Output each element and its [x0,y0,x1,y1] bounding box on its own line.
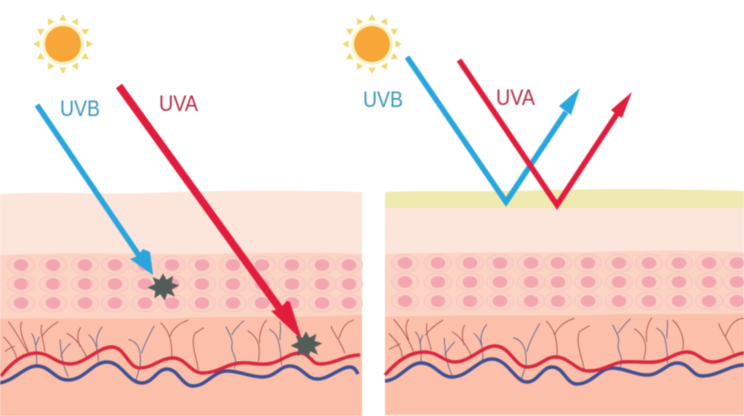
sun: right [342,14,402,74]
sun: left [33,14,93,74]
label: UVB right: UVB [363,87,403,112]
skin layer: outer epidermis [385,205,744,260]
panel: unprotected skin [0,191,362,416]
damage burst: dermis [291,331,322,359]
vein [0,362,358,386]
arrow: UVA penetrating to dermis [119,86,302,340]
arrow: UVB reflected [407,57,580,202]
sunscreen layer [385,189,744,208]
artery [1,347,360,376]
arrow: UVA reflected [459,60,632,205]
panel: protected skin with sunscreen [385,189,744,415]
capillaries [389,318,744,379]
label: UVB left: UVB [60,96,100,121]
skin layer: cell layer [0,253,362,322]
skin layer: dermis [0,315,362,416]
label: UVA right: UVA [496,85,535,110]
skin layer: cell layer [385,250,744,320]
skin layer: outer epidermis [0,191,362,260]
artery [385,346,744,375]
vein [385,359,744,384]
label: UVA left: UVA [159,91,198,116]
skin layer: dermis [385,313,744,415]
arrow: UVB penetrating to cell layer [37,105,153,275]
damage burst: cell layer [148,273,179,301]
capillaries [3,320,354,380]
